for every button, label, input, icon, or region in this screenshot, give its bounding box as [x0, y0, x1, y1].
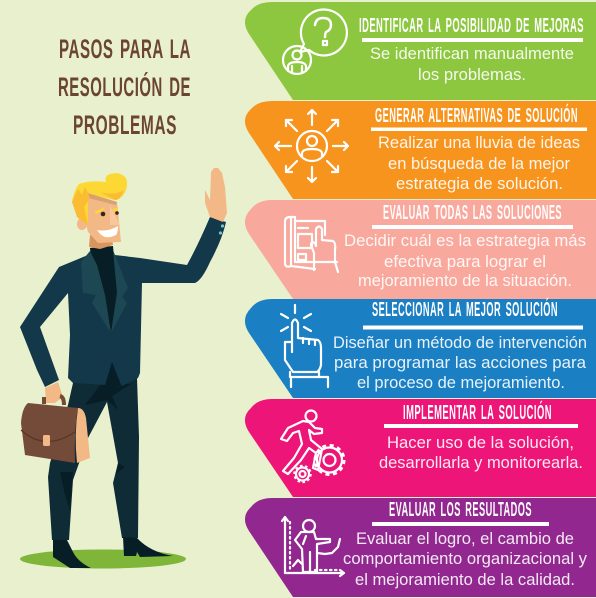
cuff buttons [221, 224, 224, 228]
panel: step 5 implementar [245, 399, 596, 497]
legs [48, 378, 139, 540]
icon: finger tap [281, 305, 328, 387]
icon: runner with gears [281, 410, 344, 482]
icon: person with question bubble [283, 9, 347, 74]
icon: document with pointing hand [285, 217, 338, 272]
title: PROBLEMAS [73, 110, 177, 140]
panel: step 1 identificar [245, 2, 596, 100]
body text: Se identifican manualmente [370, 44, 574, 63]
body text: desarrollarla y monitorearla. [379, 453, 583, 472]
panel: step 2 generar [245, 101, 596, 199]
body text: Diseñar un método de intervención [333, 333, 587, 352]
body text: para programar las acciones para [334, 353, 587, 372]
illustration: businessman waving [20, 168, 227, 568]
head [72, 173, 127, 249]
title: PASOS PARA LA [59, 34, 191, 64]
icon: person with radiating arrows [275, 110, 348, 182]
panel: step 6 evaluar resultados [245, 498, 596, 597]
body text: efectiva para lograr el [384, 252, 546, 271]
jacket [20, 217, 226, 387]
body text [379, 433, 583, 472]
body text: comportamiento organizacional y [343, 549, 587, 568]
icon: person with chart [282, 517, 344, 576]
body text: Decidir cuál es la estrategia más [344, 231, 586, 250]
body text: los problemas. [418, 65, 526, 84]
body text: Hacer uso de la solución, [387, 433, 574, 452]
body text [343, 529, 587, 589]
body text: mejoramiento de la situación. [358, 271, 572, 290]
title: RESOLUCIÓN DE [58, 71, 191, 102]
briefcase and hand [21, 382, 90, 463]
title [58, 34, 191, 140]
body text: el proceso de mejoramiento. [357, 373, 565, 392]
body text: el mejoramiento de la calidad. [355, 570, 575, 589]
lapels [81, 251, 111, 333]
panel: step 3 evaluar soluciones [245, 200, 596, 299]
body text [370, 44, 574, 84]
body text [333, 333, 587, 392]
raised hand [205, 168, 227, 222]
ground shadow [20, 550, 186, 568]
body text [344, 231, 586, 290]
body text: en búsqueda de la mejor [388, 154, 570, 173]
shoes [53, 537, 173, 568]
shirt [90, 246, 117, 333]
body text: Realizar una lluvia de ideas [378, 133, 580, 152]
body text: estrategia de solución. [396, 174, 563, 193]
hair [72, 173, 127, 225]
body text [378, 133, 580, 193]
body text: Evaluar el logro, el cambio de [356, 529, 574, 548]
panel: step 4 seleccionar [245, 297, 596, 398]
